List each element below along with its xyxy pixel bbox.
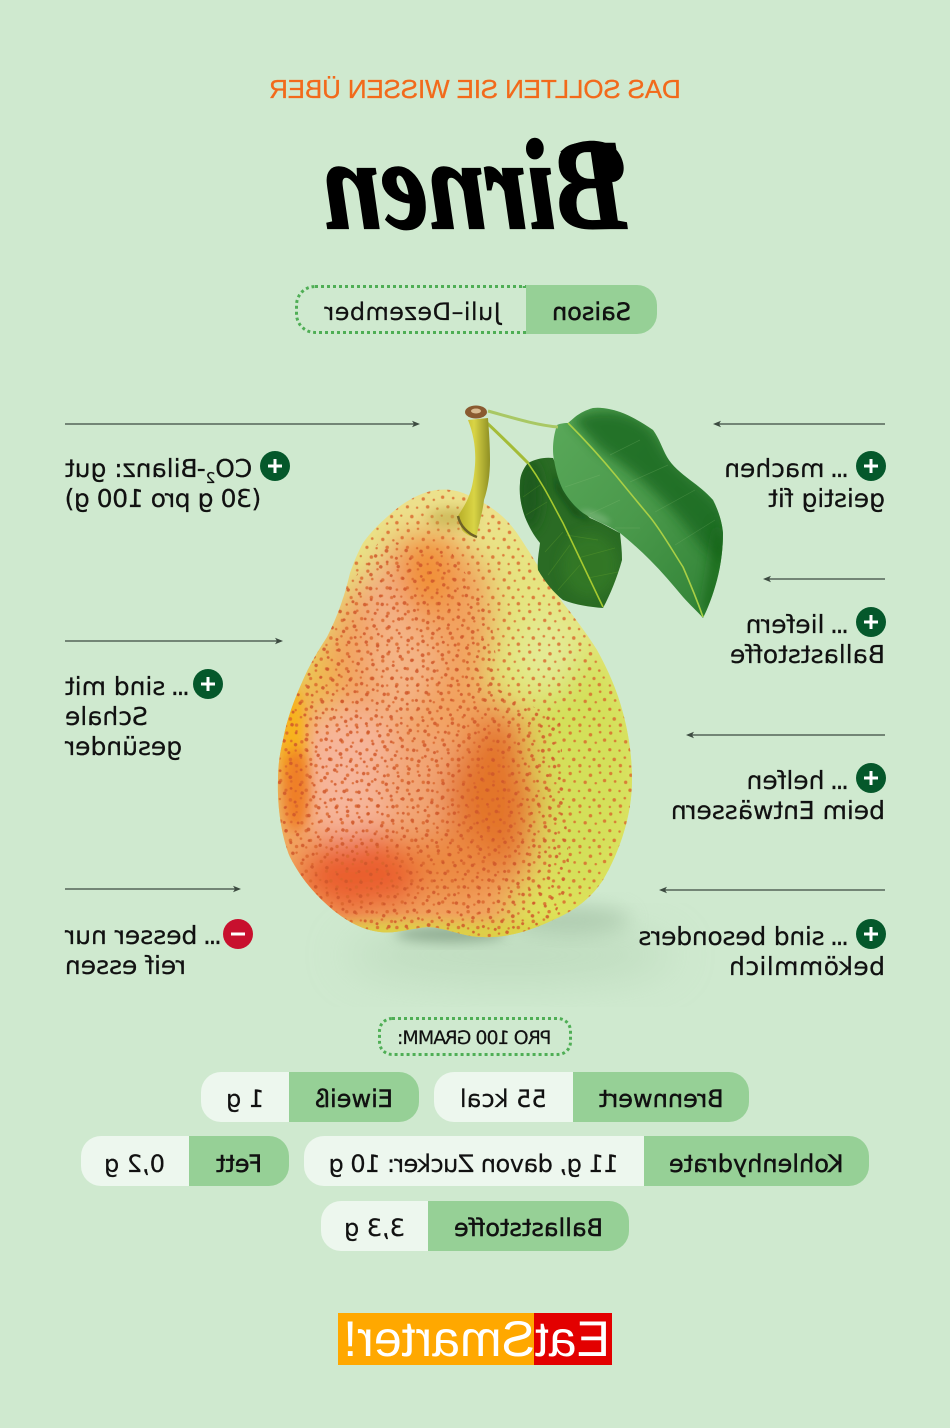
icon: minus — [223, 919, 253, 949]
callout: liefern Ballaststoffe — [730, 576, 886, 669]
front leaf — [553, 408, 730, 618]
label — [573, 1072, 749, 1122]
text: ... sind besonders — [639, 922, 849, 951]
pear illustration — [278, 406, 723, 982]
text: (30 g pro 100 g) — [65, 484, 261, 513]
icon: plus — [856, 451, 886, 481]
text: CO2-Bilanz: gut — [65, 454, 252, 487]
text: Schale — [65, 702, 148, 731]
label: Ballaststoffe — [454, 1214, 603, 1242]
text: reif essen — [65, 951, 186, 980]
nutrient pill: Eiweiß — [201, 1072, 419, 1122]
text: ... liefern — [746, 610, 849, 639]
text: bekömmlich — [729, 952, 885, 981]
text — [639, 922, 885, 981]
text: geistig fit — [768, 484, 885, 513]
season value: Juli–Dezember — [324, 298, 500, 326]
arrow — [65, 886, 241, 892]
season value — [295, 285, 526, 334]
pear body — [278, 490, 632, 938]
nutrition heading: PRO 100 GRAMM: — [398, 1027, 552, 1049]
title swash on B — [560, 140, 624, 182]
red logo block — [534, 1313, 612, 1365]
icon: plus — [193, 669, 223, 699]
callout: helfen beim Entwässern — [671, 732, 886, 825]
label: Eiweiß — [315, 1085, 393, 1113]
label: Kohlenhydrate — [669, 1150, 844, 1178]
text — [730, 610, 885, 669]
arrow — [686, 732, 885, 738]
value — [304, 1136, 644, 1186]
value: 3,3 g — [344, 1214, 405, 1242]
pear stem — [458, 406, 490, 537]
nutrient pill: Ballaststoffe — [321, 1201, 629, 1251]
nutrient pill: Fett — [81, 1136, 289, 1186]
text: gesünder — [65, 732, 182, 761]
value: 11 g, davon Zucker: 10 g — [329, 1150, 619, 1178]
label — [644, 1136, 869, 1186]
label — [289, 1072, 419, 1122]
text — [724, 454, 885, 513]
callout: sind mit Schale gesünder — [64, 638, 283, 761]
nutrition heading — [378, 1017, 572, 1056]
text — [64, 921, 222, 980]
value — [81, 1136, 189, 1186]
callout: CO2-Bilanz — [65, 420, 420, 513]
arrow — [763, 576, 885, 582]
text — [64, 672, 190, 761]
text: Ballaststoffe — [730, 640, 885, 669]
value: 0,2 g — [104, 1150, 166, 1178]
label — [189, 1136, 289, 1186]
callout: sind besonders bekömmlich — [639, 886, 886, 981]
season badge — [295, 285, 657, 334]
logo wordmark: EatSmarter! — [343, 1311, 610, 1367]
nutrient pill: Brennwert — [434, 1072, 749, 1122]
text: ... helfen — [747, 766, 849, 795]
label: Fett — [216, 1150, 262, 1178]
text — [65, 454, 261, 513]
text: ... sind mit — [65, 672, 190, 701]
nutrient pill: Kohlenhydrate — [304, 1136, 869, 1186]
rear leaf — [518, 458, 622, 608]
text: beim Entwässern — [671, 796, 885, 825]
value — [321, 1201, 428, 1251]
icon: plus — [856, 919, 886, 949]
label: Brennwert — [599, 1085, 723, 1113]
title: Birnen — [322, 113, 626, 255]
text — [671, 766, 885, 825]
text: ... machen — [724, 454, 849, 483]
value — [201, 1072, 289, 1122]
value: 1 g — [226, 1085, 264, 1113]
icon: plus — [260, 451, 290, 481]
kicker heading: DAS SOLLTEN SIE WISSEN ÜBER — [269, 74, 681, 104]
season label: Saison — [552, 298, 631, 326]
label — [428, 1201, 629, 1251]
callout: besser nur reif essen — [64, 886, 253, 980]
ground shadow — [345, 906, 675, 981]
season label — [526, 285, 657, 334]
icon: plus — [856, 607, 886, 637]
arrow — [713, 420, 885, 428]
icon: plus — [856, 763, 886, 793]
arrow — [659, 886, 885, 894]
leaf stems — [487, 411, 558, 463]
arrow — [65, 420, 420, 428]
logo: EatSmarter — [338, 1313, 612, 1365]
value: 55 kcal — [460, 1085, 547, 1113]
arrow — [65, 638, 283, 644]
text: ... besser nur — [65, 921, 222, 950]
value — [434, 1072, 573, 1122]
callout: machen geistig fit — [713, 420, 886, 513]
